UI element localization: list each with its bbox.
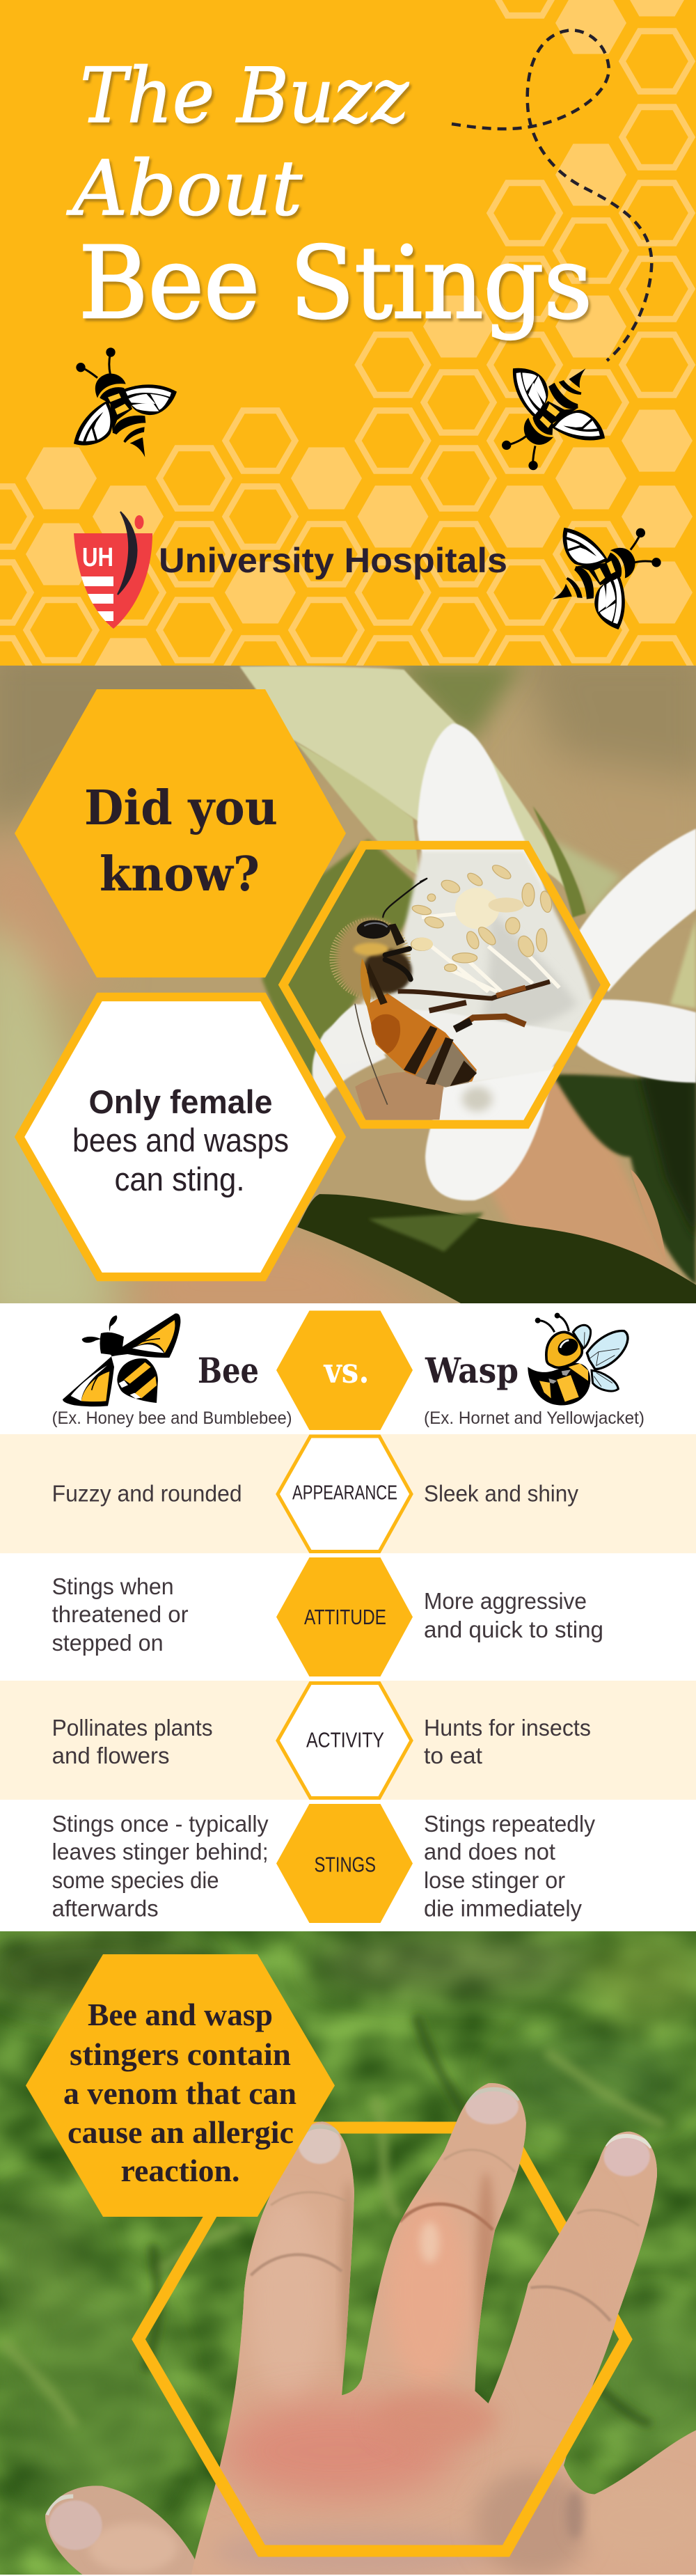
heading hexagon: did you know: know? xyxy=(100,847,260,902)
row: appearance xyxy=(52,1436,578,1551)
dashed flight path xyxy=(452,30,651,361)
row: attitude: and quick to sting xyxy=(424,1617,603,1642)
University Hospitals logo xyxy=(70,512,507,629)
heading hexagon: did you know xyxy=(15,689,346,977)
photo: bee on white blossom xyxy=(0,641,696,1330)
row: appearance: APPEARANCE xyxy=(292,1482,397,1504)
row: activity: Pollinates plants xyxy=(52,1715,213,1741)
title: About xyxy=(66,144,302,233)
bee photo hexagon frame xyxy=(283,845,606,1124)
icon: bee right lower xyxy=(551,526,663,631)
bee label: Bee xyxy=(198,1350,259,1391)
icon: bee right upper xyxy=(473,340,617,480)
row: stings: and does not xyxy=(424,1839,555,1864)
row: attitude: stepped on xyxy=(52,1630,164,1656)
University Hospitals logo: UH xyxy=(82,543,113,572)
callout hexagon: venom: stingers contain xyxy=(70,2036,291,2072)
row: stings: die immediately xyxy=(424,1895,582,1922)
row: activity xyxy=(52,1683,591,1798)
row: stings xyxy=(52,1804,595,1923)
bee and wasp example captions xyxy=(52,1408,644,1428)
University Hospitals logo: University Hospitals xyxy=(159,541,507,580)
icon: wasp xyxy=(528,1313,628,1405)
row: activity: and flowers xyxy=(52,1743,170,1768)
row: appearance: Fuzzy and rounded xyxy=(52,1480,242,1507)
row: stings: leaves stinger behind; xyxy=(52,1839,269,1864)
icon: bee left xyxy=(74,347,177,457)
row: stings: Stings repeatedly xyxy=(424,1811,595,1837)
row: activity: to eat xyxy=(424,1743,482,1768)
panel: bee vs wasp comparison table xyxy=(0,1303,696,1931)
bee on flower xyxy=(335,879,550,1105)
row: appearance: Sleek and shiny xyxy=(424,1480,578,1507)
fact hexagon: only female: bees and wasps xyxy=(72,1122,289,1159)
panel: allergic reaction photo xyxy=(0,1929,696,2576)
row: stings: afterwards xyxy=(52,1895,159,1922)
fact hexagon: only female: Only female xyxy=(89,1083,273,1120)
fact hexagon: only female xyxy=(19,997,341,1277)
row: attitude: Stings when xyxy=(52,1573,174,1599)
panel: did you know photo xyxy=(0,641,696,1330)
row: activity: ACTIVITY xyxy=(306,1728,384,1752)
row: stings: Stings once - typically xyxy=(52,1811,269,1837)
row: stings: lose stinger or xyxy=(424,1867,565,1893)
callout hexagon: venom: a venom that can xyxy=(63,2075,296,2111)
fact hexagon: only female: can sting. xyxy=(114,1161,245,1197)
row: attitude: More aggressive xyxy=(424,1588,587,1614)
title: The Buzz xyxy=(80,52,409,140)
callout hexagon: venom: reaction. xyxy=(121,2153,239,2188)
row: attitude: threatened or xyxy=(52,1601,189,1627)
icon: bee xyxy=(63,1313,180,1406)
wasp label: Wasp xyxy=(425,1350,519,1391)
title: Bee Stings xyxy=(79,225,592,341)
callout hexagon: venom: Bee and wasp xyxy=(88,1997,273,2032)
photo: grass background xyxy=(0,1929,696,2575)
callout hexagon: venom xyxy=(26,1954,335,2217)
title xyxy=(66,52,592,341)
honeycomb background xyxy=(0,0,693,700)
row: activity: Hunts for insects xyxy=(424,1715,591,1741)
row: stings: STINGS xyxy=(315,1852,376,1877)
photo: swollen hand xyxy=(40,2078,696,2576)
row: attitude: ATTITUDE xyxy=(304,1605,386,1629)
row: stings: some species die xyxy=(52,1867,219,1893)
large hexagon outline xyxy=(139,2128,626,2551)
heading hexagon: did you know: Did you xyxy=(84,780,278,836)
vs hexagon xyxy=(276,1310,413,1430)
header panel xyxy=(0,0,696,700)
vs hexagon: vs. xyxy=(324,1350,369,1391)
row: attitude xyxy=(52,1557,603,1676)
bee and wasp example captions: (Ex. Honey bee and Bumblebee) xyxy=(52,1408,292,1428)
callout hexagon: venom: cause an allergic xyxy=(68,2114,294,2150)
bee and wasp example captions: (Ex. Hornet and Yellowjacket) xyxy=(424,1408,644,1428)
photo: fingers in front of hexagon xyxy=(28,1969,657,2339)
